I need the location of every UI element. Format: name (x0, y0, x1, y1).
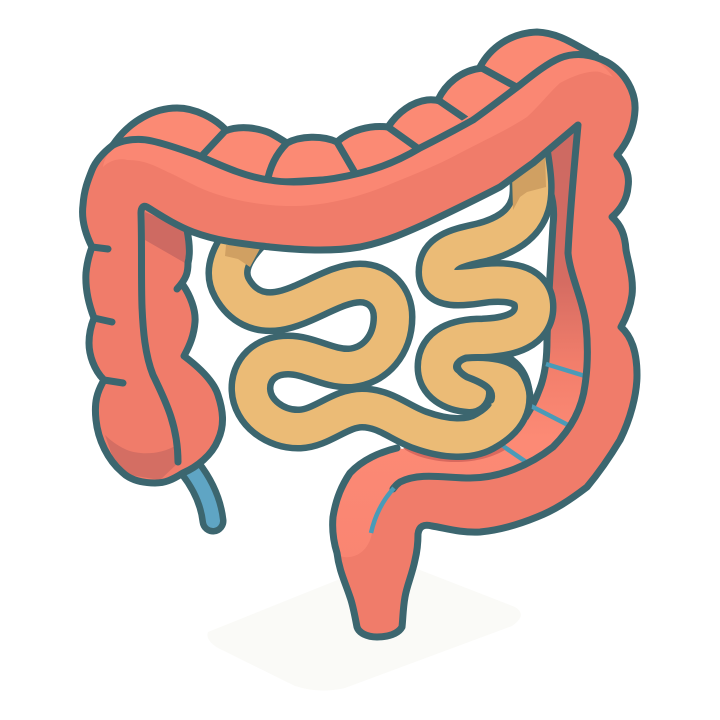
ascending colon inner shadow (145, 212, 187, 263)
rectum muscle line (371, 488, 394, 533)
small intestine (225, 150, 546, 438)
cecum shading (105, 435, 178, 480)
curled tip (457, 358, 530, 415)
haustra: upper colon pouches (113, 32, 596, 185)
descending colon back wall (333, 125, 600, 565)
muscle bands (500, 364, 585, 464)
colon outlines (83, 55, 637, 637)
right loops (437, 150, 534, 393)
top highlight band (103, 54, 613, 206)
left loops (228, 232, 510, 438)
appendix (190, 468, 213, 521)
floor shadow (207, 567, 521, 691)
shadow under small intestine (403, 430, 505, 462)
folded shading (225, 152, 546, 267)
large intestine front (83, 54, 637, 637)
